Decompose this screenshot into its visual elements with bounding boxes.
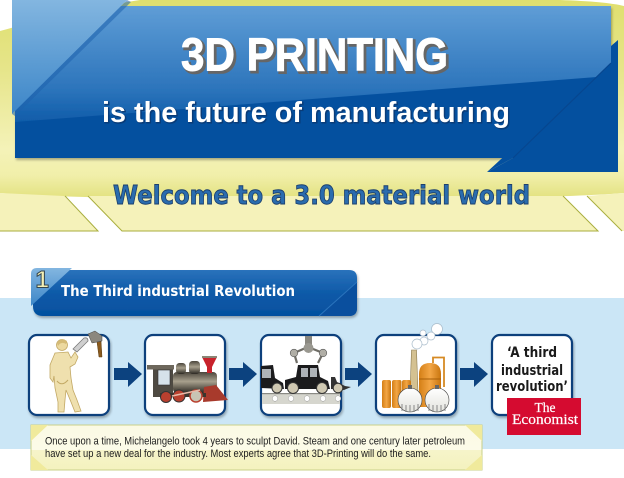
caption text: Once upon a time, Michelangelo took 4 years to sculpt David. Steam and one century later petroleum bbox=[45, 436, 465, 448]
step 3: assembly line bbox=[261, 335, 351, 415]
arrow bbox=[345, 362, 372, 387]
arrow bbox=[229, 362, 257, 387]
quote text bbox=[496, 345, 568, 395]
quote card bbox=[492, 335, 572, 415]
icon: chisel and hammer bbox=[73, 331, 102, 357]
yellow header background bbox=[0, 0, 624, 199]
quote text: revolution’ bbox=[496, 379, 568, 395]
icon: spheres bbox=[398, 385, 449, 412]
icon: robot arm bbox=[290, 336, 327, 363]
section header bbox=[31, 266, 357, 316]
section title: The Third industrial Revolution bbox=[61, 282, 295, 300]
section band bbox=[0, 298, 624, 449]
tagline: Welcome to a 3.0 material world bbox=[113, 181, 530, 211]
arrow bbox=[114, 362, 142, 387]
main title banner bbox=[12, 0, 618, 172]
caption text bbox=[45, 436, 465, 460]
arrow bbox=[460, 362, 488, 387]
icon: tanks bbox=[382, 358, 444, 408]
The Economist logo bbox=[507, 398, 581, 435]
step 4: refinery bbox=[376, 324, 456, 415]
ribbon tails bbox=[0, 193, 624, 231]
icon: cars bbox=[261, 365, 351, 394]
caption text: have set up a new deal for the industry. Most experts agree that 3D-Printing will do the same. bbox=[45, 448, 431, 460]
subtitle: is the future of manufacturing bbox=[102, 97, 510, 129]
subtitle: is the future of manufacturing bbox=[103, 98, 511, 130]
quote text: industrial bbox=[501, 363, 563, 379]
caption panel bbox=[31, 425, 482, 470]
step 2: locomotive bbox=[145, 335, 228, 415]
title: 3D PRINTING: 3D PRINTING bbox=[183, 30, 450, 82]
The Economist logo: Economist bbox=[512, 412, 578, 428]
quote text: ‘A third bbox=[507, 345, 557, 361]
icon: train bbox=[147, 356, 228, 402]
icon: steam bbox=[412, 324, 442, 349]
icon: chimney bbox=[410, 350, 418, 392]
section number: 1 bbox=[36, 266, 49, 294]
icon: conveyor bbox=[262, 393, 341, 404]
The Economist logo: The bbox=[534, 400, 556, 415]
icon: statue bbox=[50, 339, 81, 412]
step 1: David bbox=[29, 331, 109, 415]
title: 3D PRINTING: 3D PRINTING bbox=[181, 28, 448, 80]
